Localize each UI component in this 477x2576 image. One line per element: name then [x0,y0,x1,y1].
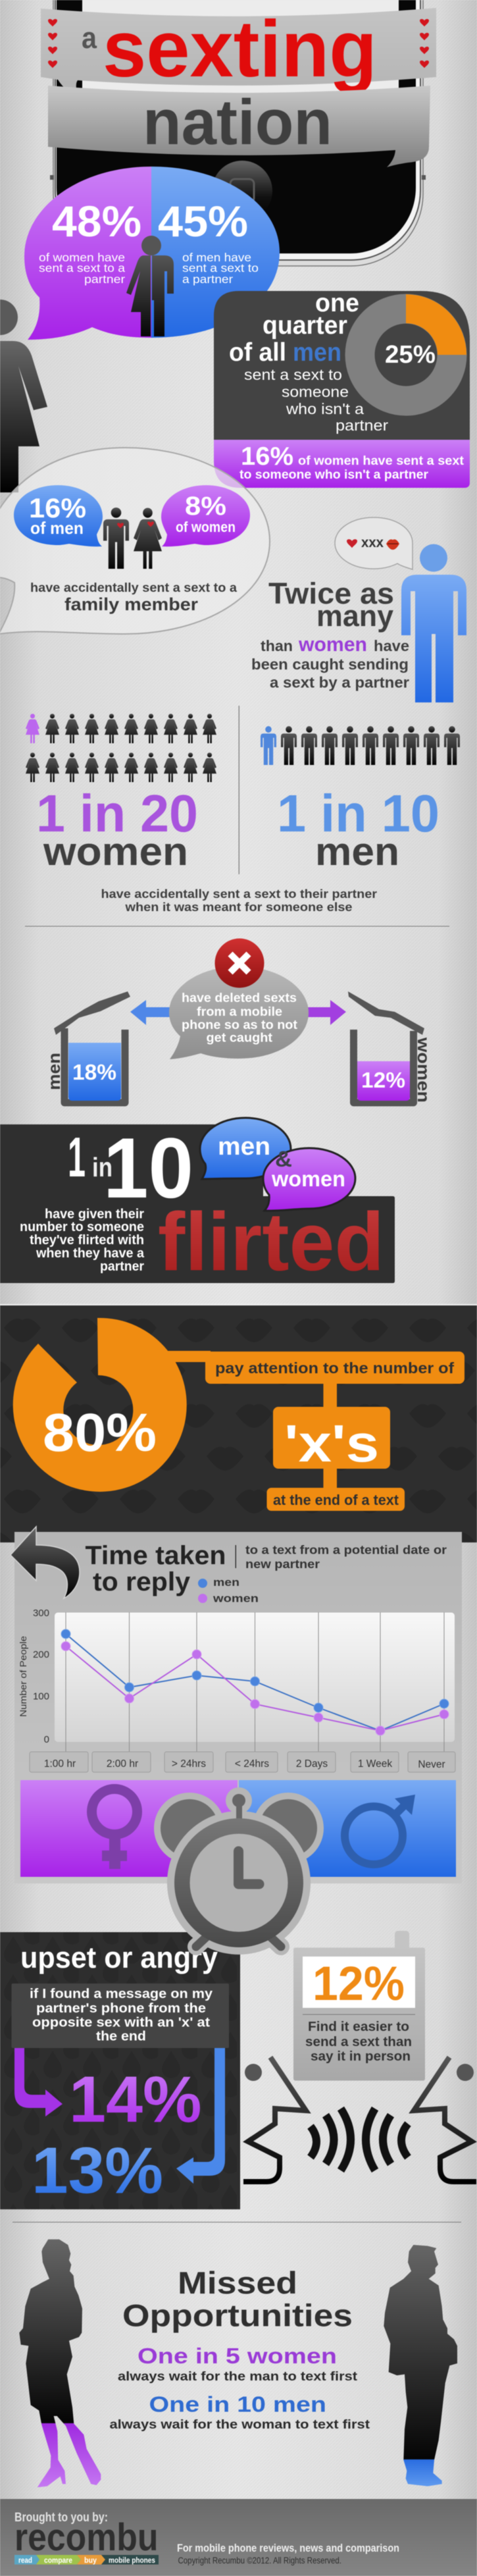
panel: 16% of women: of women have sent a sext [298,454,464,468]
x-axis labels: < 24hrs [235,1758,269,1770]
x-axis labels: 2 Days [296,1758,328,1770]
heading [86,1541,226,1596]
label: question: opposite sex with an 'x' at [32,2014,210,2030]
statistic: 1 in 20 women: women [43,829,188,874]
statistic: 1 in 10 men [261,726,460,874]
panel: one quarter of all men: someone [282,383,349,400]
callout: twice as many: many [316,599,393,633]
bubble: men [200,1118,291,1179]
panel: 48% women 45% men speech bubble: partner [84,273,125,286]
icon row: men pictograms [261,726,460,765]
bubble: 8% of women: of women [176,519,236,535]
arrow: purple right [305,1000,346,1025]
gender strip: female [20,1780,238,1877]
icon: men house 18%: 18% [72,1060,116,1084]
title banner: nation [48,86,430,167]
line chart: 300 [33,1608,49,1619]
text block: missed opportunities: always wait for the woman to text first [109,2417,370,2432]
panel: time taken to reply [11,1527,462,1883]
bubble: men: men [218,1133,270,1161]
panel: family member speech bubble [0,448,270,634]
label: 'x's: 'x's [284,1414,379,1473]
bubble: deleted sexts text: from a mobile [197,1005,282,1019]
label: at the end of a text [267,1488,405,1511]
arrow: purple [14,2048,63,2116]
icon: women house 12%: 12% [361,1068,405,1092]
panel: upset or angry: upset or angry [20,1941,218,1974]
footer: Copyright Recumbu ©2012. All Rights Reserved. [178,2556,341,2565]
label: question [12,1984,229,2048]
icon: women house 12% [348,991,434,1103]
bubble: deleted sexts text [169,966,309,1059]
panel: one quarter of all men [214,289,470,440]
panel: 1 in 10 men and women flirted: they've flirted with [30,1233,144,1248]
panel: one quarter of all men: quarter [263,311,347,340]
bubble: deleted sexts text: have deleted sexts [182,991,297,1005]
subheading [245,1543,447,1571]
icon: couple [103,508,162,569]
callout: twice as many: than [261,637,293,654]
card: 12% easier to sext: Find it easier to [308,2020,409,2034]
text block: missed opportunities: One in 5 women [138,2344,337,2368]
icon: blue man [401,544,466,702]
text block: missed opportunities [109,2265,370,2432]
x-axis labels: 1 Week [358,1758,392,1770]
panel: family member speech bubble: family member [64,594,199,614]
text block: missed opportunities: always wait for the man to text first [118,2369,358,2384]
logo: recombu: recombu [14,2516,158,2559]
panel: one quarter of all men: sent a sext to [244,366,342,383]
icon: men house 18% [44,991,130,1103]
caption: sent to partner by accident: have accidentally sent a sext to their partner [101,887,377,901]
panel: 1 in 10 men and women flirted: & [275,1147,292,1172]
logo: recombu: mobile phones [109,2556,155,2565]
icon: lips [386,539,399,550]
logo: recombu: read [18,2556,32,2565]
panel: 1 in 10 men and women flirted: 10 [103,1120,193,1216]
label: question: partner's phone from the [36,2001,206,2016]
bubble: 8% of women: 8% [185,492,226,521]
silhouette: woman [19,2240,101,2487]
bubble: women [263,1148,355,1211]
panel: one quarter of all men: of all [229,338,286,367]
panel: 16% of women: 16% [241,442,293,471]
callout: twice as many [251,517,466,702]
line chart [18,1608,455,1772]
callout: twice as many: been caught sending [251,656,409,673]
panel: 1 in 10 men and women flirted: flirted [158,1197,384,1288]
bubble: deleted sexts text: get caught [207,1031,273,1045]
panel: deleted sexts [44,939,434,1103]
statistic: 1 in 20 women: 1 in 20 [36,784,198,843]
bubble: 16% of men [14,485,103,546]
card: 12% easier to sext [293,1931,425,2080]
x-axis labels: > 24hrs [172,1758,206,1770]
icon: men house 18%: men [44,1053,64,1090]
panel: 16% of women: to someone who isn't a partner [239,468,429,482]
label: question: the end [96,2029,146,2043]
bubble: deleted sexts text: phone so as to not [182,1018,297,1032]
callout: twice as many: a sext by a partner [270,674,409,691]
arrow: blue left [130,1000,172,1025]
title banner: a sexting: a [82,21,97,55]
footer: For mobile phone reviews, news and comparison [177,2542,399,2554]
card: 12% easier to sext: 12% [313,1957,405,2011]
panel: 80% pay attention to x's [0,1304,477,1542]
panel: family member speech bubble: have accidentally sent a sext to a [30,581,237,595]
phone illustration [50,0,426,266]
x-axis labels: Never [418,1759,445,1770]
panel: one quarter of all men: men [293,338,341,367]
title banner: nation: nation [143,86,332,158]
panel: 48% women 45% men speech bubble: sent a sext to [182,261,259,275]
legend: men [213,1576,239,1589]
subheading: new partner [245,1558,320,1571]
card: 12% easier to sext: send a sext than [305,2035,412,2049]
caption: sent to partner by accident [101,887,377,914]
icon: reply arrow [11,1527,80,1598]
callout: twice as many: Twice as [268,577,394,610]
panel: upset or angry [0,1932,240,2209]
subheading: to a text from a potential date or [245,1543,447,1556]
gender strip: male [239,1780,456,1877]
hearts [48,19,429,68]
icon: women house 12%: women [414,1037,434,1103]
label: question: if I found a message on my [30,1986,213,2001]
panel: 48% women 45% men speech bubble: 48% [52,197,141,246]
panel: 1 in 10 men and women flirted: 1 [68,1126,86,1189]
donut chart: 25% [360,294,466,401]
panel: 1 in 10 men and women flirted: number to someone [20,1220,144,1234]
bubble: 16% of men: of men [30,518,84,538]
icon: red delete button [214,939,264,987]
line chart: 0 [44,1734,49,1745]
caption: sent to partner by accident: when it was meant for someone else [124,901,353,914]
x-axis labels: 1:00 hr [44,1758,76,1770]
panel: 1 in 10 men and women flirted: have given their [45,1207,144,1222]
label: at the end of a text: at the end of a text [273,1492,399,1508]
panel: upset or angry: 13% [32,2134,163,2207]
label: pay attention [205,1352,464,1384]
panel: one quarter of all men: one [315,289,359,317]
bubble: xxx: xxx [361,535,384,550]
statistic: 1 in 10 men: men [315,829,399,874]
footer [0,2499,477,2576]
bubble: 16% of men: 16% [29,492,86,523]
panel: 48% women 45% men speech bubble: a partner [182,273,233,286]
legend: women [213,1592,259,1605]
panel: upset or angry: 14% [69,2063,201,2136]
icon: two faces talking [243,2057,476,2182]
right face [414,2057,476,2182]
heading: to reply [93,1567,191,1596]
panel: 48% women 45% men speech bubble: sent a sext to a [39,261,125,275]
text block: missed opportunities: One in 10 men [149,2392,326,2417]
text block: missed opportunities: Missed [178,2265,297,2300]
panel: 1 in 10 men and women flirted: when they have a [36,1246,145,1261]
panel: 48% women 45% men speech bubble: of men have [182,251,251,264]
line chart: 100 [33,1691,49,1702]
panel: 48% women 45% men speech bubble [24,167,280,340]
callout: twice as many: women [298,633,367,656]
series: men [61,1629,449,1735]
card: 12% easier to sext: say it in person [311,2049,411,2064]
icon: alarm clock [154,1787,324,1955]
bubble: women: women [271,1167,345,1191]
panel: one quarter of all men: who isn't a [286,400,364,417]
title banner: a sexting [41,4,436,97]
panel: 48% women 45% men speech bubble: 45% [158,197,248,246]
legend [198,1576,259,1605]
icon row: women pictograms [26,714,216,782]
arrow: blue [176,2048,225,2184]
statistic: 1 in 10 men: 1 in 10 [277,784,439,843]
x-axis labels [30,1752,455,1772]
panel: 1 in 10 men and women flirted [0,1118,395,1288]
label: 'x's [273,1407,390,1473]
series: women [61,1642,449,1735]
bubble: xxx [335,517,413,569]
panel: 16% of women [214,440,470,488]
donut chart: 25%: 25% [385,341,436,369]
panel: 48% women 45% men speech bubble: of women have [39,251,125,264]
line chart: Number of People [18,1636,28,1717]
chart: 80% pie [13,1318,187,1492]
x-axis labels: 2:00 hr [107,1758,138,1770]
footer: Brought to you by: [14,2511,108,2525]
line chart: 200 [33,1649,49,1660]
logo: recombu: buy [84,2556,97,2565]
icon: large woman figure at left edge [0,300,47,492]
left face [243,2057,306,2182]
icon: half woman half man figure [126,236,174,336]
logo: recombu: compare [44,2556,72,2565]
panel: one quarter of all men: partner [336,417,388,434]
connector bars [164,1351,211,1362]
panel: 1 in 10 men and women flirted: partner [100,1259,144,1274]
bubble: 8% of women [161,485,250,546]
title banner: a sexting: sexting [103,4,377,93]
callout: twice as many: have [374,637,409,654]
silhouette: man [384,2245,457,2486]
heading: Time taken [86,1541,226,1570]
statistic: 1 in 20 women [26,714,216,874]
chart: 80% pie: 80% [43,1403,157,1463]
panel: 1 in 10 men and women flirted: in [92,1152,113,1182]
text block: missed opportunities: Opportunities [122,2298,353,2333]
label: pay attention: pay attention to the number of [215,1359,454,1377]
sound waves [311,2109,408,2170]
